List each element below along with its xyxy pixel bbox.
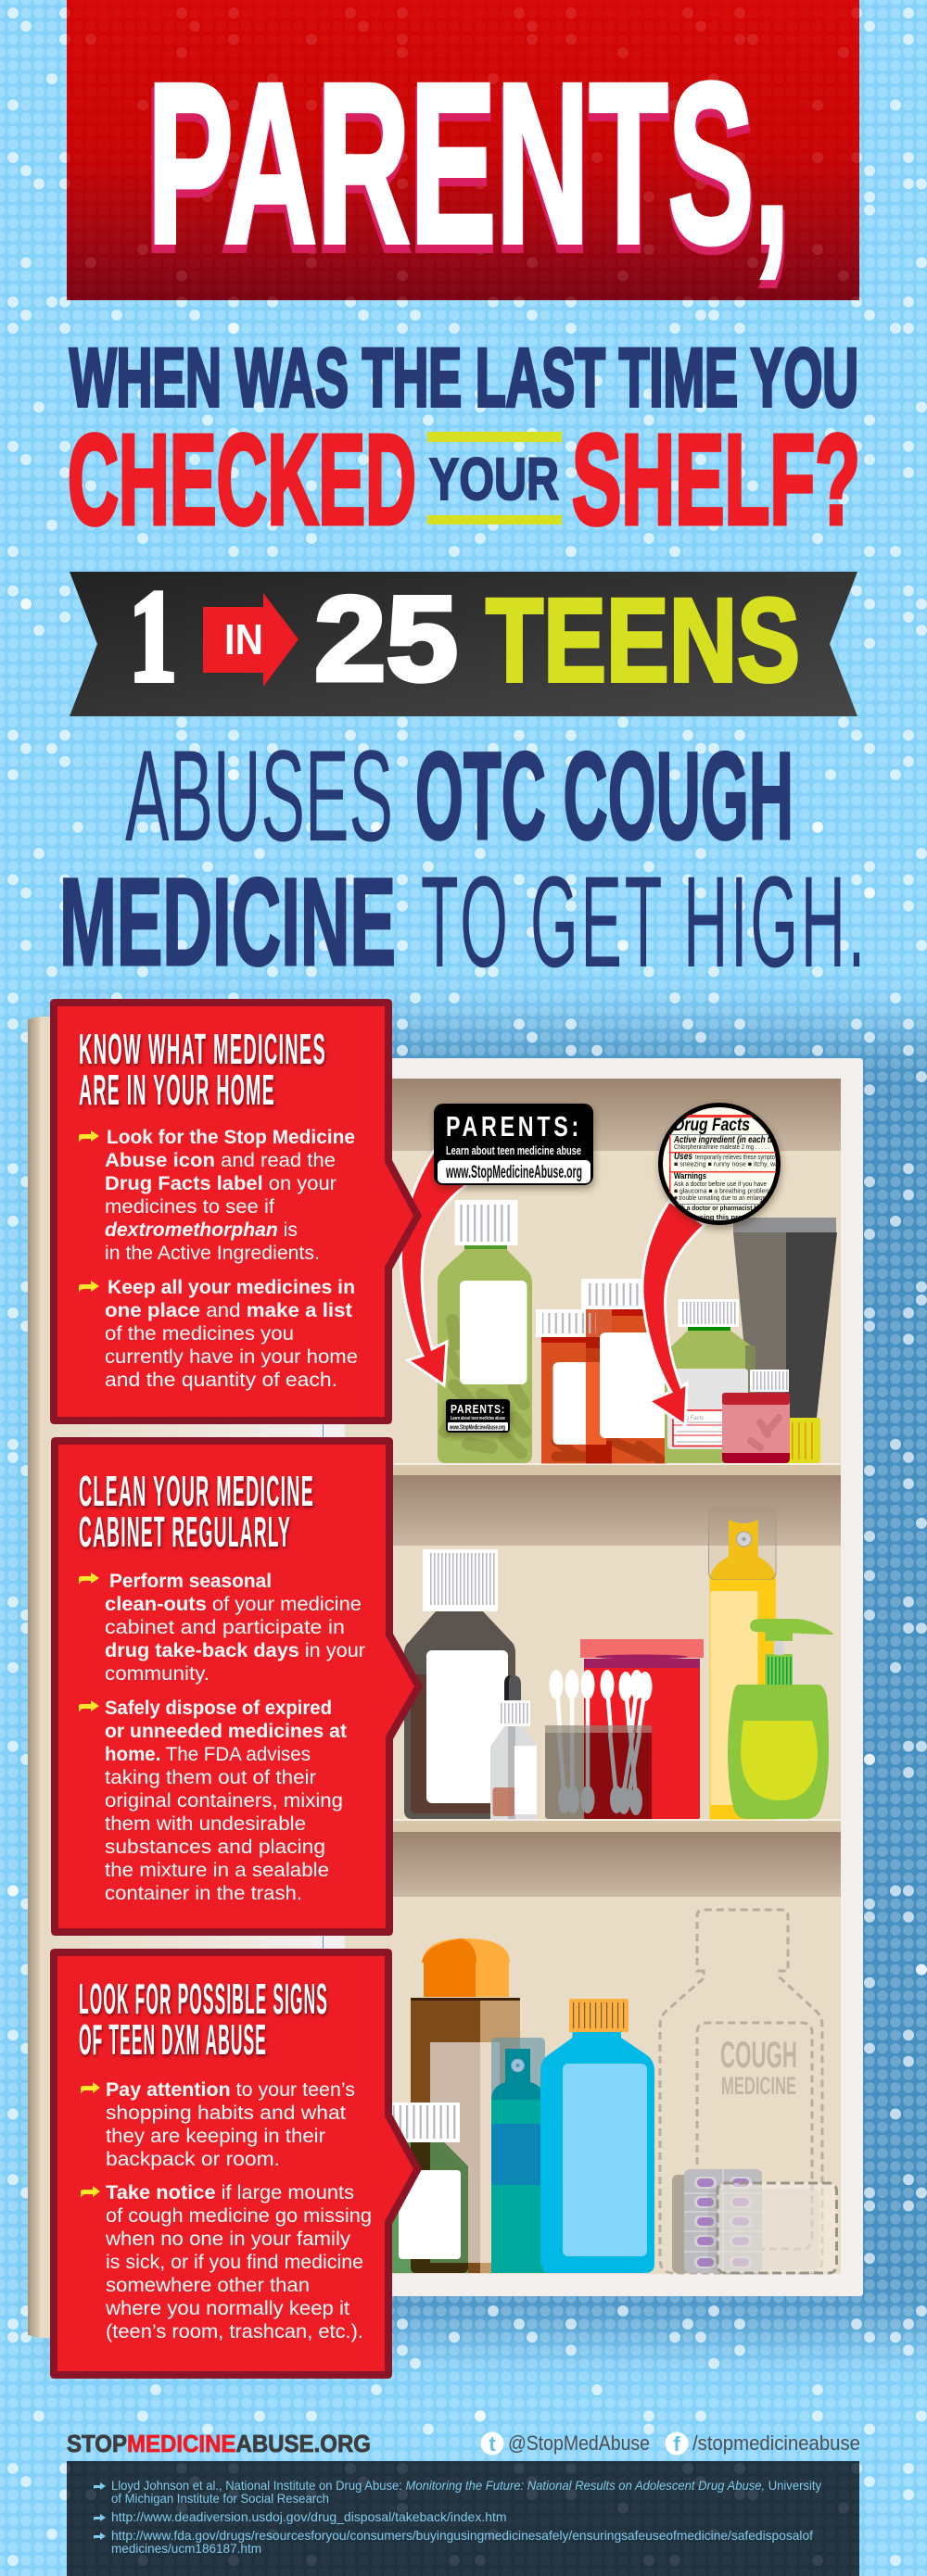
icon: drug facts magnifier: ■ glaucoma ■ a breathing problem su [674, 1188, 779, 1195]
dropper bottle [490, 1675, 537, 1820]
text block: bullet one: clean-outs of your medicine [105, 1593, 362, 1615]
icon: drug facts magnifier: Chlorpheniramine maleate 2 mg . . . . . [674, 1144, 769, 1151]
red jar [580, 1639, 704, 1819]
text block: bullet two: Safely dispose of expired [105, 1697, 332, 1719]
subheading: abuses otc cough: ABUSES [125, 723, 393, 868]
shelf 1 front [345, 1464, 841, 1475]
label: cough medicine [720, 2035, 797, 2100]
text block: bullet one: backpack or room. [106, 2148, 280, 2170]
text block: bullet one: drug take-back days in your [105, 1639, 365, 1661]
icon: drug facts magnifier: When using this product [674, 1213, 758, 1221]
cotton swab cup [545, 1670, 653, 1819]
heading: OF TEEN DXM ABUSE [79, 2015, 267, 2064]
heading: checked your shelf: CHECKED [68, 409, 416, 551]
green bottle with drug facts label [665, 1299, 756, 1463]
icon: drug facts magnifier: ■ sneezing ■ runny nose ■ itchy, wa [674, 1162, 779, 1168]
icon: bullet arrow [94, 2514, 106, 2521]
text block: bullet two: container in the trash. [105, 1882, 302, 1904]
orange pill bottles [536, 1279, 669, 1464]
panel: know what medicines are in your home: KNOW WHAT MEDICINES [79, 1025, 326, 1073]
shelf 1 items [438, 1200, 837, 1464]
text block: bullet two: them with undesirable [105, 1812, 306, 1835]
icon: bullet arrow [94, 2482, 106, 2490]
text block: bullet one: community. [105, 1662, 210, 1685]
banner: 1 in 25 teens: 25 [314, 571, 458, 706]
icon: drug facts magnifier: Ask a doctor before use if you have [674, 1181, 767, 1188]
dashed cough medicine bottle [660, 1910, 822, 2273]
icon: drug facts magnifier: Warnings [674, 1171, 706, 1181]
text block: bullet one: Drug Facts label on your [105, 1172, 337, 1194]
text block: bullet two: of cough medicine go missing [106, 2204, 372, 2227]
icon: parents badge small: www.StopMedicineAbuse.org [449, 1425, 505, 1431]
banner: 1 in 25 teens: TEENS [486, 575, 800, 707]
icon: bullet arrow [79, 1572, 99, 1585]
icon: parents badge: Learn about teen medicine abuse [446, 1143, 581, 1157]
panel: clean your medicine cabinet regularly: CLEAN YOUR MEDICINE [79, 1467, 314, 1515]
reference one: of Michigan Institute for Social Research [111, 2491, 329, 2506]
icon: facebook [666, 2431, 688, 2456]
icon: parents badge small: Learn about teen medicine abuse [451, 1416, 505, 1421]
label: cough medicine: COUGH [720, 2035, 797, 2076]
icon: twitter: t [489, 2432, 496, 2456]
medicine cabinet [345, 1058, 863, 2296]
icon: parents badge: www.StopMedicineAbuse.org [445, 1163, 582, 1182]
yellow spray can [708, 1507, 776, 1820]
teal spray bottle [491, 2038, 545, 2273]
reference one: Lloyd Johnson et al., National Institute on Drug Abuse: Monitoring the Future: National Results on Adolescent Drug Abuse, University [111, 2478, 821, 2493]
text block: bullet one: in the Active Ingredients. [105, 1242, 320, 1264]
icon: parents badge: PARENTS: [446, 1110, 582, 1143]
text block: bullet two: where you normally keep it [105, 2297, 349, 2319]
icon: in arrow [203, 593, 298, 687]
reference three: medicines/ucm186187.htm [111, 2541, 261, 2556]
icon: drug facts magnifier: Active ingredient (in each ta [673, 1135, 774, 1145]
text block: bullet one: shopping habits and what [106, 2102, 346, 2124]
text block: bullet one [105, 1570, 365, 1685]
reference two: http://www.deadiversion.usdoj.gov/drug_disposal/takeback/index.htm [111, 2509, 506, 2524]
text block: bullet two: Keep all your medicines in [108, 1276, 355, 1298]
icon: drug facts magnifier: temporarily relieves these sympto [695, 1155, 775, 1161]
icon: bullet arrow [94, 2532, 106, 2540]
text block: bullet one: dextromethorphan is [105, 1219, 298, 1241]
brown bottle with orange cap [411, 1938, 520, 2273]
reference one [111, 2478, 821, 2506]
text block: bullet one: cabinet and participate in [105, 1616, 345, 1638]
logo: stopmedicineabuse.org: STOPMEDICINEABUSE.ORG [67, 2430, 371, 2457]
small red pill bottle [722, 1370, 790, 1463]
tube [733, 1218, 837, 1463]
icon: bullet arrow [79, 1130, 99, 1143]
icon: bullet arrow [81, 2186, 100, 2198]
cabinet frame [345, 1058, 863, 2296]
dark syrup bottle [404, 1549, 515, 1819]
heading [79, 1025, 326, 1114]
heading [79, 1467, 314, 1556]
social: twitter: @StopMedAbuse [508, 2431, 650, 2455]
heading [79, 1975, 328, 2064]
green bottle with drug facts label: Drug Facts [677, 1416, 704, 1421]
panel: know what medicines are in your home [50, 999, 422, 1424]
text block: bullet two: of the medicines you [105, 1322, 294, 1345]
icon: drug facts magnifier: Uses [674, 1152, 692, 1162]
icon: drug facts magnifier: Ask a doctor or pharmacist bef [674, 1204, 763, 1212]
icon: facebook: f [673, 2432, 680, 2456]
label: cough medicine: MEDICINE [721, 2072, 796, 2100]
cabinet door [28, 1017, 345, 2338]
text block: bullet two: original containers, mixing [105, 1789, 343, 1812]
arrow: to stop medicine abuse icon [401, 1145, 465, 1385]
text block: bullet two: when no one in your family [105, 2228, 350, 2250]
text block: bullet two: the mixture in a sealable [105, 1859, 329, 1881]
text block: bullet two [105, 1697, 347, 1904]
heading: ARE IN YOUR HOME [79, 1066, 275, 1114]
cabinet interior [345, 1079, 841, 2274]
icon: parents badge small: PARENTS: [451, 1402, 505, 1416]
panel: look for possible signs of teen dxm abuse: LOOK FOR POSSIBLE SIGNS [79, 1975, 328, 2023]
text block: bullet one: medicines to see if [105, 1195, 274, 1218]
text block: bullet two: or unneeded medicines at [105, 1720, 347, 1742]
icon: drug facts magnifier [658, 1103, 781, 1225]
text block: bullet one [105, 1126, 355, 1264]
panel: references [67, 2461, 859, 2576]
reference three [111, 2528, 813, 2556]
text block: bullet one: Abuse icon and read the [105, 1149, 336, 1171]
icon: bullet arrow [81, 2082, 100, 2094]
text block: bullet one: Pay attention to your teen’s [106, 2078, 355, 2101]
icon: blister pack [672, 2169, 836, 2273]
text block: bullet two: substances and placing [105, 1836, 325, 1858]
icon: parents badge [434, 1104, 593, 1185]
text block: bullet one: Perform seasonal [109, 1570, 272, 1592]
text block: bullet one [106, 2078, 355, 2170]
arrow: to drug facts label [642, 1201, 705, 1425]
text block: bullet two: Take notice if large mounts [106, 2181, 354, 2203]
green bottle [438, 1200, 532, 1463]
banner: 1 in 25 teens: 1 [129, 562, 177, 709]
heading: checked your shelf: YOUR [429, 446, 559, 512]
text block: bullet two: one place and make a list [105, 1299, 352, 1321]
green bottle behind panel [371, 2102, 468, 2273]
icon: drug facts magnifier: Drug Facts [674, 1116, 750, 1135]
panel: clean your medicine cabinet regularly [51, 1437, 423, 1936]
text block: bullet two: (teen’s room, trashcan, etc.). [106, 2320, 363, 2342]
text block: bullet two: somewhere other than [106, 2274, 310, 2296]
icon: bullet arrow [79, 1281, 99, 1293]
green soap pump [728, 1619, 833, 1819]
icon: bullet arrow [79, 1700, 99, 1712]
social: facebook: /stopmedicineabuse [692, 2431, 860, 2455]
text block: bullet two: is sick, or if you find medicine [106, 2251, 363, 2273]
panel: look for possible signs of teen dxm abuse [50, 1949, 422, 2379]
icon: drug facts magnifier: ■ trouble urinating due to an enlarge [674, 1195, 766, 1202]
icon: twitter [480, 2431, 504, 2456]
blue bottle [540, 1999, 654, 2273]
subheading: medicine to get high: MEDICINE [59, 853, 396, 991]
text block: bullet two: and the quantity of each. [105, 1369, 337, 1391]
banner: 1 in 25 teens [70, 562, 857, 716]
icon: in arrow: IN [224, 615, 263, 663]
text block: bullet two [105, 1276, 358, 1391]
text block: bullet one: they are keeping in their [106, 2125, 325, 2147]
panel: clean your medicine cabinet regularly: CABINET REGULARLY [79, 1508, 291, 1556]
text block: bullet one: Look for the Stop Medicine [107, 1126, 355, 1148]
text block: bullet two: currently have in your home [105, 1345, 358, 1368]
shelf 2 front [345, 1820, 841, 1832]
text block: bullet two: home. The FDA advises [105, 1743, 311, 1765]
text block: bullet two [105, 2181, 372, 2342]
icon: parents badge small [446, 1399, 510, 1433]
text block: bullet two: taking them out of their [105, 1766, 316, 1788]
reference three: http://www.fda.gov/drugs/resourcesforyou/consumers/buyingusingmedicinesafely/ensuringsafeuseofmedicine/safedisposalof [111, 2528, 813, 2543]
shelf 2 items [404, 1507, 833, 1820]
shelf 3 items [371, 1910, 836, 2273]
